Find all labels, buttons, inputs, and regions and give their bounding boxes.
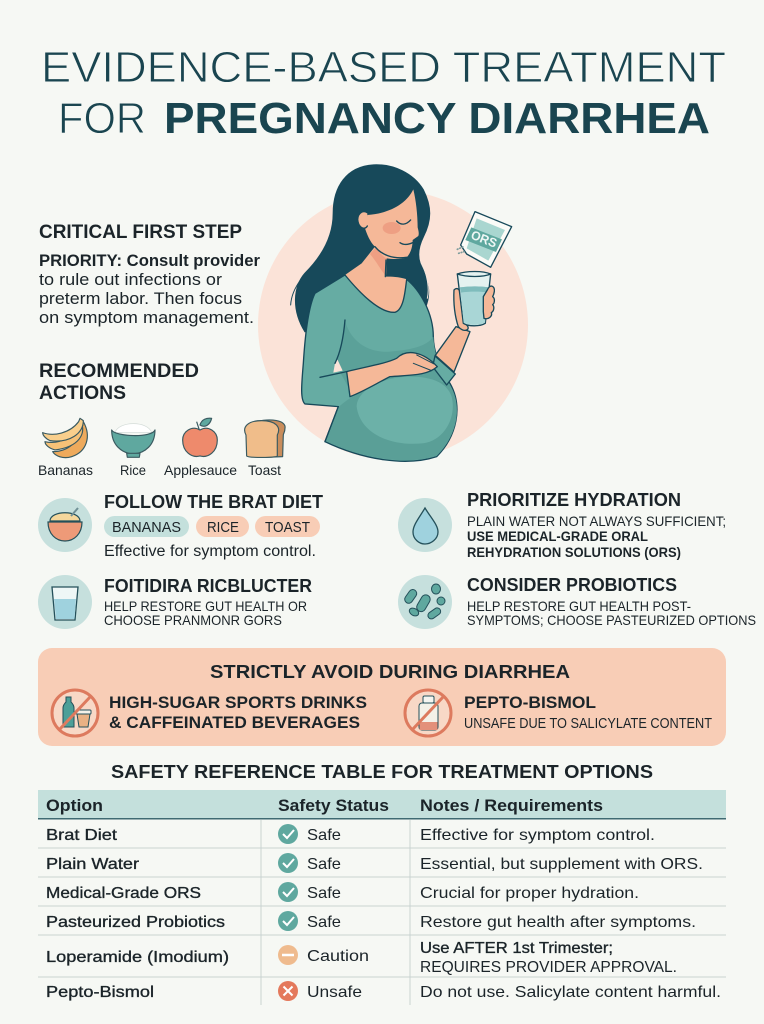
row: pasteurized probiotics: Pasteurized Probiotics	[46, 914, 225, 931]
icon: oatmeal bowl	[38, 498, 92, 552]
critical first step text block: to rule out infections or	[39, 271, 223, 289]
icon: glass of water	[38, 575, 92, 629]
critical first step text block: CRITICAL FIRST STEP	[39, 221, 242, 243]
row: loperamide: Loperamide (Imodium)	[46, 949, 229, 966]
icon: toast	[245, 420, 285, 457]
icon: no sports drinks	[52, 690, 98, 736]
panel: strictly avoid: & CAFFEINATED BEVERAGES	[109, 714, 360, 732]
table header: Safety Status	[278, 797, 389, 815]
panel: strictly avoid: PEPTO-BISMOL	[464, 694, 596, 712]
recommended actions heading	[39, 360, 199, 404]
icon: rice bowl	[112, 424, 155, 457]
action: foitidira ricblucter	[38, 575, 312, 629]
row: pepto-bismol: Unsafe	[307, 984, 362, 1001]
row: brat diet: Safe	[307, 827, 341, 844]
critical first step text block: on symptom management.	[39, 309, 254, 327]
title	[41, 43, 726, 143]
illustration: pregnant woman drinking ORS: ORS	[469, 228, 499, 251]
row: pepto-bismol: Do not use. Salicylate content harmful.	[420, 984, 721, 1001]
row: pasteurized probiotics	[46, 911, 696, 931]
food icons row: Bananas	[38, 462, 93, 478]
panel: strictly avoid: UNSAFE DUE TO SALICYLATE CONTENT	[464, 715, 712, 732]
food icons row: Toast	[248, 462, 281, 478]
action: follow the BRAT diet: FOLLOW THE BRAT DIET	[104, 491, 324, 512]
panel: strictly avoid	[38, 648, 726, 746]
pill: toast	[255, 516, 320, 537]
icon: water drop	[398, 498, 452, 552]
food icons row	[38, 418, 285, 478]
action: prioritize hydration: REHYDRATION SOLUTIONS (ORS)	[467, 544, 681, 560]
illustration: pregnant woman drinking ORS	[258, 165, 528, 461]
title: PREGNANCY DIARRHEA	[164, 94, 710, 143]
row: plain water	[46, 853, 703, 873]
action: foitidira ricblucter: CHOOSE PRANMONR GORS	[104, 612, 282, 628]
pill: bananas: BANANAS	[112, 519, 181, 536]
critical first step text block: PRIORITY: Consult provider	[39, 252, 261, 270]
row: pepto-bismol	[46, 981, 721, 1001]
row: medical-grade ORS	[46, 882, 639, 902]
action: prioritize hydration	[398, 489, 726, 560]
table header: Option	[46, 797, 103, 815]
action: follow the BRAT diet	[38, 491, 324, 560]
food icons row: Applesauce	[164, 462, 237, 478]
row: pasteurized probiotics: Safe	[307, 914, 341, 931]
action: prioritize hydration: PLAIN WATER NOT ALWAYS SUFFICIENT;	[467, 513, 726, 529]
row: loperamide: Caution	[307, 948, 369, 965]
food icons row: Rice	[120, 462, 146, 478]
icon: bananas	[43, 418, 87, 458]
row: brat diet: Effective for symptom control.	[420, 827, 655, 844]
row: pepto-bismol: Pepto-Bismol	[46, 984, 154, 1001]
pill: rice	[196, 516, 249, 537]
action: prioritize hydration: USE MEDICAL-GRADE ORAL	[467, 528, 648, 544]
row: plain water: Essential, but supplement with ORS.	[420, 856, 703, 873]
panel: strictly avoid: HIGH-SUGAR SPORTS DRINKS	[109, 694, 367, 712]
critical first step text block	[39, 221, 261, 327]
title: EVIDENCE-BASED TREATMENT	[41, 43, 726, 92]
recommended actions heading: ACTIONS	[39, 382, 126, 404]
table header	[38, 790, 726, 820]
row: medical-grade ORS: Medical-Grade ORS	[46, 885, 201, 902]
row: loperamide: Use AFTER 1st Trimester;	[420, 940, 613, 957]
row: medical-grade ORS: Crucial for proper hydration.	[420, 885, 639, 902]
row: loperamide	[46, 940, 677, 976]
pill: rice: RICE	[207, 519, 239, 536]
action: follow the BRAT diet: Effective for symptom control.	[104, 543, 316, 560]
action: prioritize hydration: PRIORITIZE HYDRATION	[467, 489, 681, 510]
pill: bananas	[104, 516, 189, 537]
safety reference table	[38, 790, 726, 1005]
action: consider probiotics: CONSIDER PROBIOTICS	[467, 574, 677, 595]
action: consider probiotics	[398, 574, 756, 629]
row: medical-grade ORS: Safe	[307, 885, 341, 902]
action: foitidira ricblucter: HELP RESTORE GUT HEALTH OR	[104, 598, 307, 614]
table header: Notes / Requirements	[420, 797, 603, 815]
pill: toast: TOAST	[265, 519, 310, 536]
icon: probiotic bacteria	[398, 575, 452, 629]
row: plain water: Plain Water	[46, 856, 140, 873]
icon: apple	[183, 418, 217, 456]
heading: safety reference table: SAFETY REFERENCE TABLE FOR TREATMENT OPTIONS	[111, 761, 653, 782]
icon: no pepto-bismol	[405, 690, 451, 736]
row: brat diet: Brat Diet	[46, 827, 118, 844]
recommended actions heading: RECOMMENDED	[39, 360, 199, 382]
row: plain water: Safe	[307, 856, 341, 873]
action: consider probiotics: HELP RESTORE GUT HEALTH POST-	[467, 598, 691, 614]
row: loperamide: REQUIRES PROVIDER APPROVAL.	[420, 959, 677, 976]
row: pasteurized probiotics: Restore gut health after symptoms.	[420, 914, 696, 931]
action: foitidira ricblucter: FOITIDIRA RICBLUCTER	[104, 575, 312, 596]
title: FOR	[58, 94, 146, 143]
critical first step text block: preterm labor. Then focus	[39, 290, 242, 308]
row: brat diet	[46, 824, 655, 844]
panel: strictly avoid: STRICTLY AVOID DURING DIARRHEA	[210, 661, 570, 682]
